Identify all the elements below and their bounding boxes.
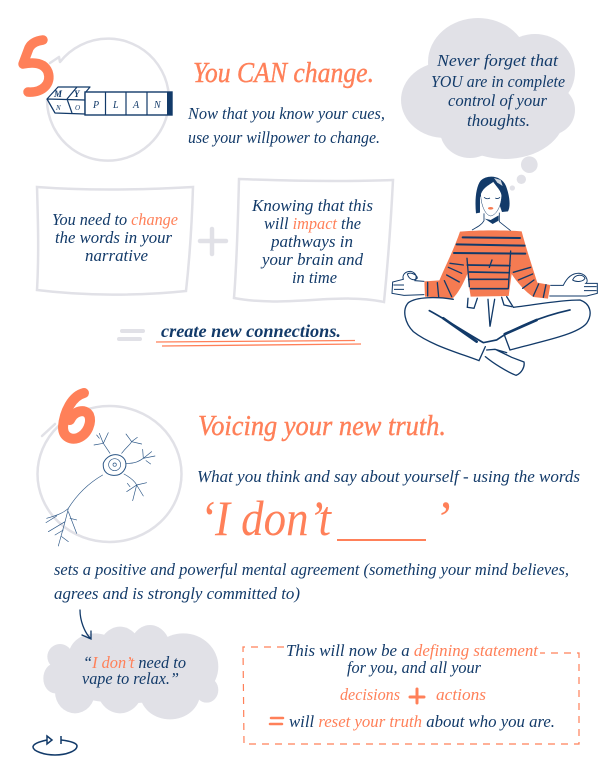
box: change the words: the words in your <box>55 228 172 247</box>
quote text <box>82 653 186 688</box>
statement: I don't: ’ <box>434 490 451 546</box>
sweater <box>424 230 550 299</box>
legs <box>405 297 590 375</box>
illustration: meditating woman <box>392 156 597 375</box>
text: what you think: What you think and say about yourself - using the words <box>197 467 580 486</box>
text: now that you know <box>187 104 385 147</box>
heading: You CAN change: You CAN change. <box>193 58 374 89</box>
icon: my plan cubes: N <box>55 104 61 112</box>
box: impact the pathways: Knowing that this <box>251 196 373 215</box>
underline <box>156 340 361 346</box>
step 6 circle <box>38 406 182 542</box>
text: create new connections: create new connections. <box>161 321 341 341</box>
cloud: vape quote <box>43 625 218 719</box>
icon: my plan cubes: L <box>112 100 119 111</box>
thought text: control of your <box>448 91 547 110</box>
equals sign <box>119 331 143 339</box>
text: sets a positive: sets a positive and powerful mental agreement (something your mind believes, <box>54 560 569 579</box>
dashed box <box>243 647 579 744</box>
arrow <box>80 610 91 639</box>
thought text <box>431 51 565 130</box>
icon: neuron <box>46 433 155 546</box>
box: change the words <box>37 187 193 295</box>
text: reset your truth: will reset your truth about who you are. <box>289 712 555 731</box>
thought text: thoughts. <box>467 111 530 130</box>
text: decisions plus actions: decisions <box>340 685 400 704</box>
quote text: “I don’t need to <box>83 653 186 672</box>
thought dots <box>510 156 538 191</box>
icon: loop arrow <box>33 736 77 755</box>
box: impact the pathways: in time <box>292 268 337 287</box>
statement: I don't: ‘I don’t <box>200 490 332 546</box>
box: impact the pathways: pathways in <box>270 232 353 251</box>
icon: my plan cubes: M <box>53 89 63 99</box>
thought text: YOU are in complete <box>431 72 565 91</box>
icon: my plan cubes: Y <box>74 89 81 99</box>
plus sign <box>200 229 226 254</box>
text: sets a positive <box>54 560 569 603</box>
box: change the words: You need to change <box>52 210 178 229</box>
head and hair <box>472 177 511 231</box>
text: defining statement: for you, and all your <box>347 658 481 677</box>
text: sets a positive: agrees and is strongly committed to) <box>54 584 300 603</box>
step number 6 <box>63 393 90 439</box>
text: now that you know: Now that you know your cues, <box>187 104 385 123</box>
thought bubble cloud <box>401 18 575 159</box>
text: decisions plus actions: actions <box>436 685 486 704</box>
box: impact the pathways <box>234 179 393 302</box>
stripes <box>428 237 546 297</box>
icon: my plan cubes <box>47 87 172 115</box>
icon: my plan cubes: P <box>92 100 99 111</box>
step 5 circle <box>47 39 169 161</box>
hands <box>392 271 597 296</box>
thought text: Never forget that <box>436 51 559 70</box>
icon: my plan cubes: N <box>153 100 162 111</box>
box: change the words: narrative <box>85 246 148 265</box>
text: defining statement <box>286 641 539 677</box>
heading: voicing your new truth: Voicing your new truth. <box>198 411 446 442</box>
quote text: vape to relax.” <box>82 669 179 688</box>
text: decisions plus actions <box>340 685 486 704</box>
box: impact the pathways: will impact the <box>264 214 361 233</box>
text: defining statement: This will now be a defining statement <box>286 641 539 660</box>
text: now that you know: use your willpower to change. <box>188 128 380 147</box>
statement: I don't <box>200 490 451 546</box>
icon: my plan cubes: A <box>132 100 140 111</box>
icon: my plan cubes: O <box>75 104 80 112</box>
step number 5 <box>23 40 49 92</box>
box: impact the pathways: your brain and <box>260 250 363 269</box>
